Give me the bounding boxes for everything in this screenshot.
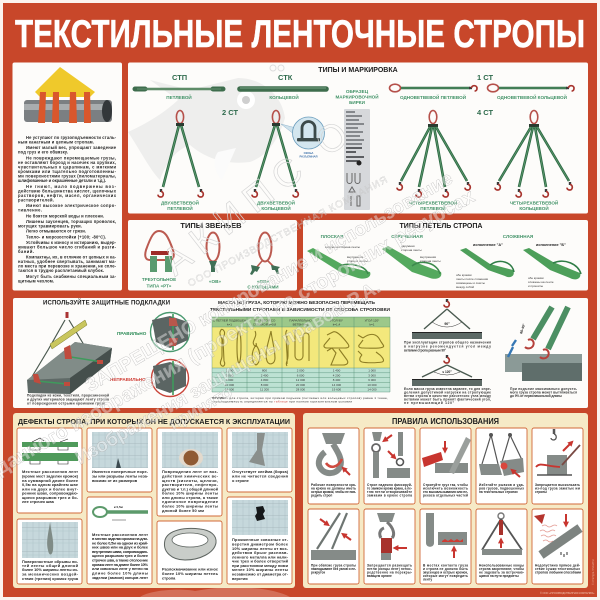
table: load by slinging method: k=1 [227,322,232,326]
rule card: avoid jerks: на текстильных стропах [479,490,518,494]
card: chemical damage: дуктов и т.п.) общей длиной [162,486,219,492]
watermark text: ЗАПРЕЩЕНО копирование и использование [82,168,456,396]
table: load by slinging method: 6 000 [297,373,305,377]
sling: four-leg loop: ПЕТЛЕВОЙ [420,204,446,211]
table: load by slinging method: 4 800 [261,378,269,382]
icon: OV link with rings: «ОВ» [257,279,269,284]
heading: load table: МАССА (кг) ГРУЗА, КОТОРУЮ МОЖНО БЕЗОПАСНО ПЕРЕМЕЩАТЬ [218,300,376,306]
table: load by slinging method [212,317,390,392]
rule card: fix the sling: тлю петли отворачивайте [367,490,412,494]
table: load by slinging method: 6 000 [226,378,234,382]
card: chemical damage: Повреждения лент от воз- [162,469,219,474]
sling: four-leg ring: ЧЕТЫРЕХВЕТВЕВОЙ [510,198,558,206]
icon: OV link [206,232,221,284]
diagram: sling angle 120: ветви стропа в качестве расчетного угла между [404,394,491,398]
illustration: slab on slings [27,312,112,394]
table: load by slinging method: 14 000 [367,388,377,392]
card: chemical damage [157,428,222,516]
rule card: no direct heat [532,509,583,584]
rule card: fix the sling: Строп надежно фиксируй- [367,483,412,487]
loop: twisted: сторона ленты [401,248,422,252]
rule card: no knots: накладывают без узлов и пе- [311,567,356,571]
sling: single-leg ring [488,84,574,100]
rule card: no sharp edges: и стропа не должно быть [423,567,468,571]
rule card: no sharp edges: В местах контакта груза [423,564,468,568]
caption: pads: от повреждения острыми кромками груза [27,402,105,406]
caption: pads [27,394,109,406]
heading: protective pads: ИСПОЛЬЗУЙТЕ ЗАЩИТНЫЕ ПОДКЛАДКИ [43,298,170,306]
loop: twisted: СКРУЧЕННАЯ [391,234,423,239]
text block: advantages list: не оставляют борозд и насечек на хрупких, [18,160,116,165]
panel: protection, load table and angles [13,298,588,408]
card: cross cuts [87,428,152,492]
diagram: sling angle 90: 90° [444,322,450,326]
diagram: sling angle 90: ветвями стропа равным 90° [404,348,447,352]
card: burn holes: верстия диаметром более [232,542,289,546]
loop: twisted: внутренняя [420,255,436,259]
text block: advantages list [17,135,117,284]
sling: four-leg ring [495,110,572,211]
sample marking tag: МАРКИРОВОЧНОЙ [335,92,379,100]
callout: shackle: РАЗЪЕМНАЯ [299,154,318,158]
rule card: hook surfaces: Рабочие поверхности кра- [311,483,356,487]
rule card: avoid jerks: Избегайте рывков и уда- [479,483,524,487]
table note: ПРИМЕР: для стропа, которая при прямом подъеме (петлевых или кольцевых стропов) равна 1 тонне, [212,396,388,400]
loop: folded: исполнение "Б" [536,243,566,247]
card: delamination: (кроме мест заделки кромок) [22,474,79,478]
table note [212,396,388,404]
rule card: hook surfaces: на крюка не должны иметь [311,486,356,490]
card: worn loops: Разлохмачивание или износ [162,566,219,572]
card: local delamination at joints [87,497,152,584]
diagram: slings on load edges [505,307,582,398]
loop: folded: СЛОЖЕННАЯ [503,234,533,239]
rule card: no knots [308,509,359,584]
text block: advantages list: Не повреждают перемещаемые грузы, [26,156,116,160]
heading: defects: ДЕФЕКТЫ СТРОПА, ПРИ КОТОРЫХ ОН НЕ ДОПУСКАЕТСЯ К ЭКСПЛУАТАЦИИ [18,417,290,426]
label: correct: ПРАВИЛЬНО [117,331,147,336]
table: load by slinging method: 10 000 [367,383,377,387]
sling: two-leg ring [252,110,298,211]
text block: advantages list: тивление. [18,208,42,212]
caption: pads: и других материалов защищают ленту стропа [27,398,109,402]
icon: triangular link: ТРЕУГОЛЬНОЕ [142,277,176,282]
rule card: no direct heat: Недопустимо прямое дей- [535,564,580,568]
card: chemical damage: ществ (кислоты, щелочи, [162,478,218,483]
card: delamination: или на двух и более внут- [22,486,79,492]
text block: advantages list: действию большинства кислот, щелочных [18,188,117,194]
sling STK [240,73,326,100]
text block: advantages list: Тепло- и морозостойки (+100; -80°С). [26,234,106,240]
table: load by slinging method: С ПЕТЛЕЙ ПОДВЕШЕН [213,318,246,322]
text block: advantages list: щитным чехлом. [18,278,54,284]
card: chemical damage: или длины стропа, а также [162,495,219,500]
table: load by slinging method: 8 000 [261,383,269,387]
heading: load table: ТЕКСТИЛЬНЫМИ СТРОПАМИ В ЗАВИСИМОСТИ ОТ СПОСОБА СТРОПОВКИ [210,307,391,313]
icon: OV link with rings [247,232,280,290]
label: 4 ST: 4 СТ [477,108,493,117]
icon: triangular link [142,231,176,288]
rule card: hook surfaces: редить строп [311,494,332,498]
icon: pipe lifted with slings [24,67,112,123]
rule card: no sharp edges: которые могут повредить [423,574,468,578]
card: burn holes: чие трех и более отверстий [232,558,289,564]
card: burn holes: Прожженные сквозные от- [232,537,289,542]
card: local delamination at joints: строчек шва, а также отслоение [92,558,149,562]
table: load by slinging method: 11 200 [260,388,269,392]
text block: advantages list: Имеют малый вес, упрощают заведение [26,145,117,150]
text block: advantages list: баний. [18,249,34,254]
text block: advantages list: натных, удобнее свертывать, занимают ма- [18,259,117,264]
panel: loop types [303,220,588,290]
loop: twisted: наружная [401,244,415,248]
label: 1 ST: 1 СТ [477,73,493,82]
rule card: do not pull out: из-под груза зажатые им [535,486,581,490]
card: delamination: на суммарной длине более [22,478,79,483]
card: local delamination at joints: Местные расслоения лент [92,532,148,537]
diagram: slings on load edges: 60-45° [519,323,526,334]
rule card: no joints on hook [364,509,415,584]
rule card: avoid jerks [476,428,527,504]
card: chemical damage: более 10% ширины ленты [162,490,219,496]
rule card: no joints on hook: петли (концы лент) непос- [367,567,412,571]
text block: advantages list: Не гниют, мало подвержены воз- [26,184,117,189]
rule card: no joints on hook: Запрещается размещать [367,564,412,568]
table: load by slinging method: ВЕТВИ k=2 [293,322,309,326]
heading: loop types: ТИПЫ ПЕТЕЛЬ СТРОПА [400,223,482,230]
rule card: fix the sling: те замком крюка крана, а пе- [367,486,412,490]
text block: advantages list: Имеют высокое электрическое сопро- [26,203,117,208]
diagram: sling angle 120: ветвями может быть принят фактический угол, [404,398,491,402]
loop: folded: между собой [456,285,474,289]
table: load by slinging method: ПАРАЛЛЕЛЬНО [289,318,312,322]
watermark text: ООО ПРОИЗВОДСТВЕННАЯ КОМПАНИЯ [186,174,390,290]
card: local delamination at joints: длине более 10% длины [92,570,149,576]
sling: two-leg loop: ДВУХВЕТВЕВОЙ [161,198,199,206]
loop: folded: обе кромки [528,276,544,280]
text block: advantages list: Устойчивы к износу и истиранию, выдер- [26,240,117,245]
panel: usage rules [303,413,588,588]
card: local delamination at joints: заделки (замков) концов лент [92,575,148,580]
text block: advantages list: ми поверхностями грузах (пиломатериалы, [18,174,116,178]
card: local delamination at joints: внутренних швах, сопровождаю- [92,549,149,554]
loop: folded: и прошиты [528,284,543,288]
panel: advantages [12,62,122,290]
text block: advantages list: шлифованные и окрашенные детали и т.д.). [18,178,106,183]
table: load by slinging method: УГОЛ 90° [330,318,344,322]
card: chemical damage: растворителя, нефтепро- [162,482,219,487]
heading: usage rules: ПРАВИЛА ИСПОЛЬЗОВАНИЯ [392,417,499,426]
card: missing tag: Отсутствует клейма (бирка) [232,469,289,474]
rule card: no direct heat: стропов любыми способами [535,570,581,574]
text block: advantages list: ло места при перевозке и хранении, не спле- [18,264,117,268]
heading: types and marking: ТИПЫ И МАРКИРОВКА [318,67,398,74]
card: chemical damage: единичное повреждение [162,499,219,504]
icon: OV link with rings: С КОЛЬЦАМИ [247,284,279,290]
rule card: hook surfaces [308,428,359,504]
watermark text: принято [166,382,235,433]
card: local delamination at joints: них швов или на двух и более [92,544,149,550]
rule card: fix the sling [364,428,415,504]
table: load by slinging method: 2 000 [297,368,305,372]
rule card: do not pull out: Запрещается выскользать [535,483,580,487]
card: worn loops: стропа [162,576,176,580]
rule card: no knots: рекруток [311,570,325,574]
text block: advantages list: Не уступают по грузоподъемности сталь- [26,135,117,140]
table: load by slinging method: 12 000 [296,378,305,382]
loop: flat [307,234,370,279]
card: delamination: Местные расслоения лент [22,469,78,474]
sling: single-leg ring: ОДНОВЕТВЕВОЙ КОЛЬЦЕВОЙ [497,93,567,100]
rule card: no sharp edges [420,509,471,584]
card: surface breaks [17,519,82,584]
icon: correct pad detail [150,312,190,352]
loop: flat: ПЛОСКАЯ [321,234,343,239]
rule card: secure loose ends: не задевать за встречаю- [479,570,524,574]
panel: link types [128,220,297,290]
card: missing tag: или не читается сведения [232,474,288,478]
card: worn loops: более 10% ширины петель [162,571,219,576]
table: load by slinging method: 1 400 [333,368,341,372]
text block: advantages list: живают большое число сгибаний и разги- [17,244,117,250]
card: surface breaks: тей ленты общей длиной [22,563,79,568]
footer credits: © СТЕНДЫ-ПЛАКАТЫ [592,558,595,585]
watermark text: АКИПС О [155,108,364,284]
lower fish watermark [140,587,290,597]
loop: flat: наружная сторона ленты [325,245,360,249]
rule card: no joints on hook: вающем органе [367,574,392,578]
card: delamination: 0,5м на одном крайнем шве [22,482,79,487]
rule card: do not pull out: стропы [535,490,547,494]
sling: single-leg loop [390,84,477,100]
card: burn holes: менее 10% ширины ленты [232,567,289,572]
card: surface breaks: ствия (трения) кромок груза [22,576,79,581]
text block: advantages list: Не боятся морской воды и плесени. [26,214,104,218]
diagram: sling angle 90: При эксплуатации стропов общего назначения [404,340,491,344]
sling: four-leg loop [397,110,470,211]
card: burn holes: 10% ширины ленты от воз- [232,546,289,551]
rule card: no sharp edges: заусенцев и острых кромок, [423,570,468,574]
sling: two-leg loop [158,110,203,211]
sling STK: КОЛЬЦЕВОЙ [269,93,299,100]
sling STP [135,73,223,100]
card: surface breaks: за механических воздей- [22,572,79,576]
table: load by slinging method: 4 200 [333,373,341,377]
icon: incorrect pad detail [152,360,188,396]
rule card: secure loose ends [476,509,527,584]
table: load by slinging method: 6 000 [368,378,376,382]
rule card: no direct heat: ствие сушки текстильных [535,567,580,571]
text block: advantages list: чувствительных к царапинам, с мягкими [18,164,116,170]
rule card: no sharp edges: ленту [423,578,432,582]
caption: pads: Подкладки из кожи, текстиля, прорезиненной [27,394,109,398]
card: chemical damage: длиной более 50 мм [162,508,204,513]
table: load by slinging method: ПЕТЛЕВОЙ СО [254,318,276,322]
card: local delamination at joints: щиеся разрывом трех и более [92,553,149,558]
icon: triangular link: ТИПА «РТ» [147,284,172,288]
card: local delamination at joints: или сквозных лент у петли на [92,566,149,571]
rule card: no knots: При обвязке груза стропы [311,564,356,568]
card: missing tag: о стропе [232,478,250,483]
table: load by slinging method: k=1 [370,322,375,326]
text block: advantages list: Лишены заусенцев, торчащих проволок, [26,219,116,224]
rule card: hook surfaces: острых кромок, чтобы не пов- [311,490,356,494]
card: local delamination at joints: кромок лент на длине более 10% [92,562,149,567]
diagram: sling angle 120: Если масса груза известна заранее, то для опре- [404,387,491,391]
text block: advantages list: ным канатным и цепным стропам. [18,140,94,144]
diagram: slings on load edges: до 9% от первоначальной длины [510,394,562,398]
rule card: secure loose ends: стропа закрепляют, чтобы [479,567,524,571]
sling: four-leg loop: ЧЕТЫРЕХВЕТВЕВОЙ [409,198,457,206]
card: cross cuts: зы или разрывы ленты неза- [92,474,149,478]
rule card: avoid slipping [420,428,471,504]
rule card: secure loose ends: щиеся на пути предметы [479,574,519,578]
card: local delamination at joints: ≥ 0,5м [114,505,124,509]
rule card: no joints on hook: редственно на перекры- [367,570,412,574]
card: delamination: ренних швах, сопровождаю- [22,490,79,496]
rule card: secure loose ends: Неиспользованные концы [479,564,524,568]
text block: advantages list: Компактны, их, в отличие от цепных и ка- [26,254,117,260]
card: chemical damage: более 10% ширины ленты [162,504,219,508]
sample marking tag: ОБРАЗЕЦ [346,89,369,94]
table: load by slinging method: СТЯЖКОЙ k=0,8 [253,322,276,326]
card: delamination: щиеся разрывом трех и бо- [22,495,79,500]
diagram: slings on load edges: При подъеме максимально допусти- [510,387,577,391]
card: delamination [17,428,82,513]
loop: folded: совмещены и сшиты [456,281,485,285]
card: delamination: лее строчек шва [22,499,55,504]
text block: advantages list: растворителей. [18,198,54,202]
text block: advantages list: могущих травмировать руки. [18,224,82,228]
rule card: avoid slipping: исключить возможность [423,486,468,490]
diagram: slings on load edges: мого груза стропа может вытягиваться [510,390,577,394]
diagram: sling angle 90 [404,299,491,352]
footer credits: © ООО «ПРОИЗВОДСТВЕННАЯ КОМПАНИЯ» [540,592,595,595]
loop: folded: обе кромки [456,273,472,277]
table: load by slinging method: 14 000 [332,383,341,387]
loop: folded [456,234,581,289]
card: burn holes [227,497,292,584]
table: load by slinging method: 8 400 [333,378,341,382]
callout: shackle [281,117,324,158]
card: surface breaks: более 10% ширины ленты из- [22,567,79,572]
card: burn holes: ленного металла или нали- [232,554,289,560]
label: 2 ST: 2 СТ [222,108,238,117]
table: load by slinging method: 19 600 [332,388,341,392]
heading: load table [210,300,391,313]
card: local delamination at joints: не более 0,5м на одном из край- [92,540,149,546]
sling: two-leg ring: КОЛЬЦЕВОЙ [261,204,291,211]
sling: two-leg ring: ДВУХВЕТВЕВОЙ [257,198,295,206]
text block: advantages list: растворов, нефти, масел, органических [18,193,117,198]
card: burn holes: верстия [232,576,248,581]
loop: flat: сторона ленты [347,259,368,263]
diagram: sling angle 120: не превышающий 120° [404,401,455,405]
card: surface breaks: Поверхностные обрывы ни- [22,559,79,564]
heading: link types: ТИПЫ ЗВЕНЬЕВ [180,221,242,230]
table: load by slinging method: k=1,4 [333,322,341,326]
icon: OV link: «ОВ» [209,279,221,284]
loop: folded: ленты после сложения [456,277,488,281]
sling: two-leg loop: ПЕТЛЕВОЙ [167,204,193,211]
card: chemical damage: действия химических ве- [162,474,219,478]
table: load by slinging method: 3 000 [226,373,234,377]
diagram: sling angle 120: ≤ 120° [442,370,452,374]
diagram: sling angle 120 [404,355,491,405]
table: load by slinging method: 3 000 [368,373,376,377]
panel: types and marking [128,62,588,214]
table: load by slinging method: 1 000 [368,368,376,372]
table note: грузоподъемность определяется по таблице при полном горизонтальном условии [212,400,352,404]
fish watermark [128,65,285,180]
text block: advantages list: Легко отмываются от грязи. [26,228,86,234]
text block: advantages list: кромками или тщательно подготовленны- [18,169,117,174]
text block: advantages list: под груз и его обвязку. [18,150,68,154]
rule card: avoid jerks: ров грузов, подвешенных [479,486,524,490]
card: local delamination at joints: в местах заделки кромок на дли- [92,536,149,541]
rule card: do not pull out [532,428,583,504]
text block: advantages list: таются в трудно расплетаемый клубок. [18,268,104,273]
label: incorrect: НЕПРАВИЛЬНО [110,377,146,382]
card: missing tag [227,428,292,492]
table: load by slinging method: 2 400 [261,373,269,377]
sling: four-leg ring: КОЛЬЦЕВОЙ [519,204,549,211]
card: cross cuts: висимо от их размеров [92,478,138,483]
sling: single-leg loop: ОДНОВЕТВЕВОЙ ПЕТЛЕВОЙ [400,93,466,100]
table: load by slinging method: 14 000 [225,388,234,392]
card: burn holes: действия брызг расплав- [232,550,289,555]
loop: twisted: сторона ленты [420,259,441,263]
rule card: avoid slipping: Стропуйте груз так, чтобы [423,483,468,487]
sample marking tag: БИРКИ [349,100,365,105]
watermark text: Изображения защищены правом Р.А. [72,277,384,469]
card: burn holes: независимо от диаметра от- [232,572,289,576]
footer credits [540,558,595,595]
sling STP: ПЕТЛЕВОЙ [166,93,192,100]
loop: twisted [382,234,441,279]
callout: shackle: СКОБА [304,151,313,155]
loop: folded: сложены на ленте [528,280,554,284]
card: burn holes: при расстоянии между ними [232,563,289,568]
panel: defects [13,413,295,588]
sling STK: СТК [278,73,293,82]
table: load by slinging method: УГОЛ 120° [365,318,380,322]
sling STP: СТП [172,73,187,82]
card: cross cuts: Имеются поперечные поре- [92,469,149,474]
diagram: sling angle 90: в нагрузке рекомендуется угол между [404,344,491,348]
sample marking tag [335,89,379,210]
watermark text: данного изображения (проекта) на сторонних ресурсах [0,185,479,479]
card: worn loops [157,521,222,584]
table: load by slinging method: 1 000 [226,368,234,372]
table: load by slinging method: 28 000 [296,388,305,392]
text block: advantages list: Могут быть снабжены специальным за- [26,274,117,279]
table: load by slinging method: 800 [262,368,267,372]
table: load by slinging method: 20 000 [296,383,305,387]
table: load by slinging method: 10 000 [225,383,234,387]
rule card: avoid slipping: его выскальзывания или пе- [423,490,468,494]
rule card: avoid slipping: рекоса отдельных частей [423,494,468,498]
loop: flat: внутренняя [347,255,363,259]
loop: folded: исполнение "А" [473,243,503,247]
rule card: fix the sling: замками в крюке стропа [367,494,412,498]
diagram: sling angle 120: деления допустимой нагрузки на стропующие [404,390,491,394]
